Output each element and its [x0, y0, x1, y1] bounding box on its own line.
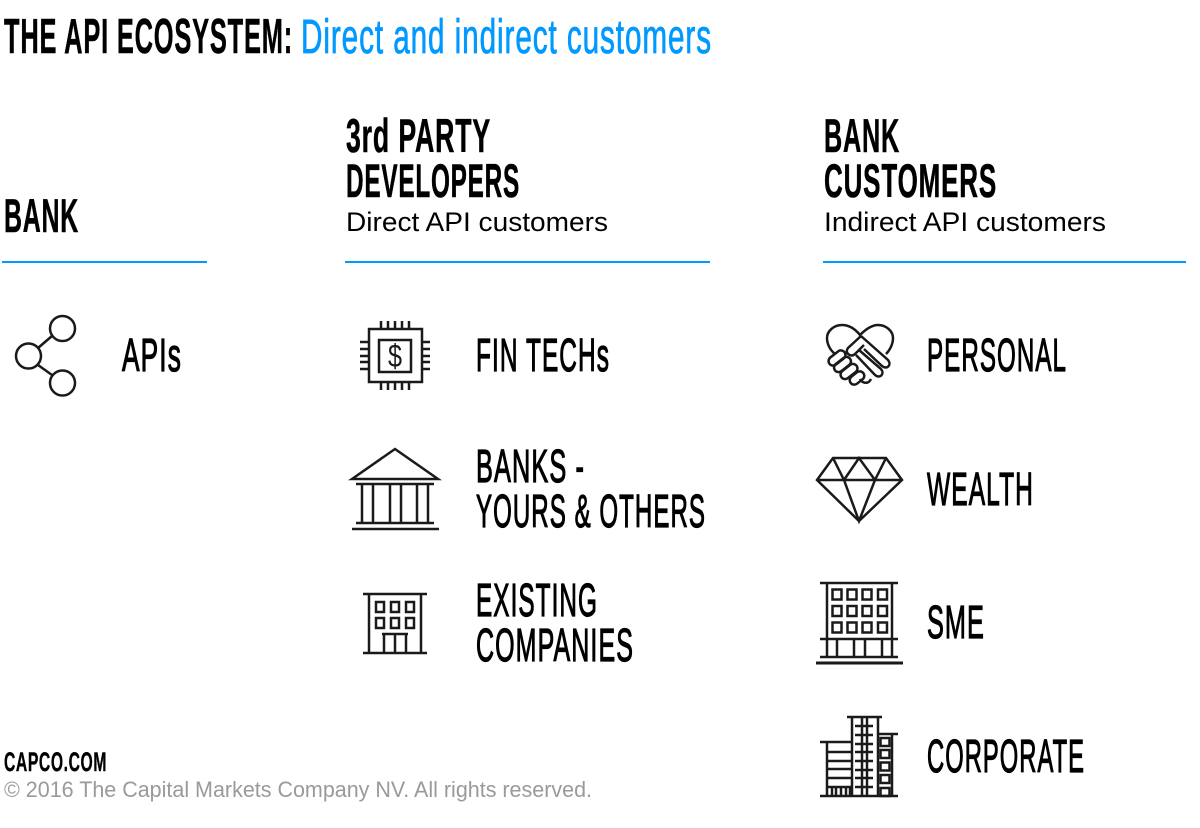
icon: handshake heart — [827, 325, 893, 386]
icon: small office — [363, 594, 427, 653]
column heading: 3rd party developers: Direct API customers — [346, 207, 608, 237]
label: banks, yours and others — [476, 440, 706, 537]
title: Direct and indirect customers — [301, 11, 712, 64]
footer: CAPCO.COM — [4, 747, 107, 777]
icon: bank building — [352, 449, 439, 529]
icon: fintech chip — [360, 321, 430, 390]
label: existing companies: EXISTING — [476, 574, 598, 626]
column heading: 3rd party developers: DEVELOPERS — [346, 154, 520, 207]
label: banks, yours and others: YOURS & OTHERS — [476, 485, 706, 537]
label: personal: PERSONAL — [927, 329, 1067, 381]
column heading: bank customers: Indirect API customers — [824, 207, 1106, 237]
column heading: bank customers: BANK — [824, 109, 900, 162]
icon: sme building — [816, 583, 903, 663]
column heading: 3rd party developers — [345, 109, 710, 263]
column heading: bank customers: CUSTOMERS — [824, 154, 997, 207]
label: fin techs: FIN TECHs — [476, 329, 610, 381]
column heading: bank: BANK — [4, 189, 79, 242]
icon: diamond — [817, 458, 902, 521]
label: wealth: WEALTH — [927, 463, 1034, 515]
icon: share nodes — [16, 316, 75, 396]
title: THE API ECOSYSTEM: — [4, 10, 293, 64]
footer: © 2016 The Capital Markets Company NV. All rights reserved. — [4, 777, 592, 802]
label: banks, yours and others: BANKS - — [476, 440, 585, 492]
footer — [4, 747, 592, 802]
column heading: bank customers — [823, 109, 1186, 263]
label: sme: SME — [927, 596, 985, 648]
icon: fintech chip: $ — [388, 338, 402, 374]
icon: corporate towers — [820, 717, 898, 796]
label: existing companies — [476, 574, 634, 671]
label: existing companies: COMPANIES — [476, 619, 634, 671]
label: APIs: APIs — [122, 329, 182, 381]
column heading: 3rd party developers: 3rd PARTY — [346, 109, 491, 162]
